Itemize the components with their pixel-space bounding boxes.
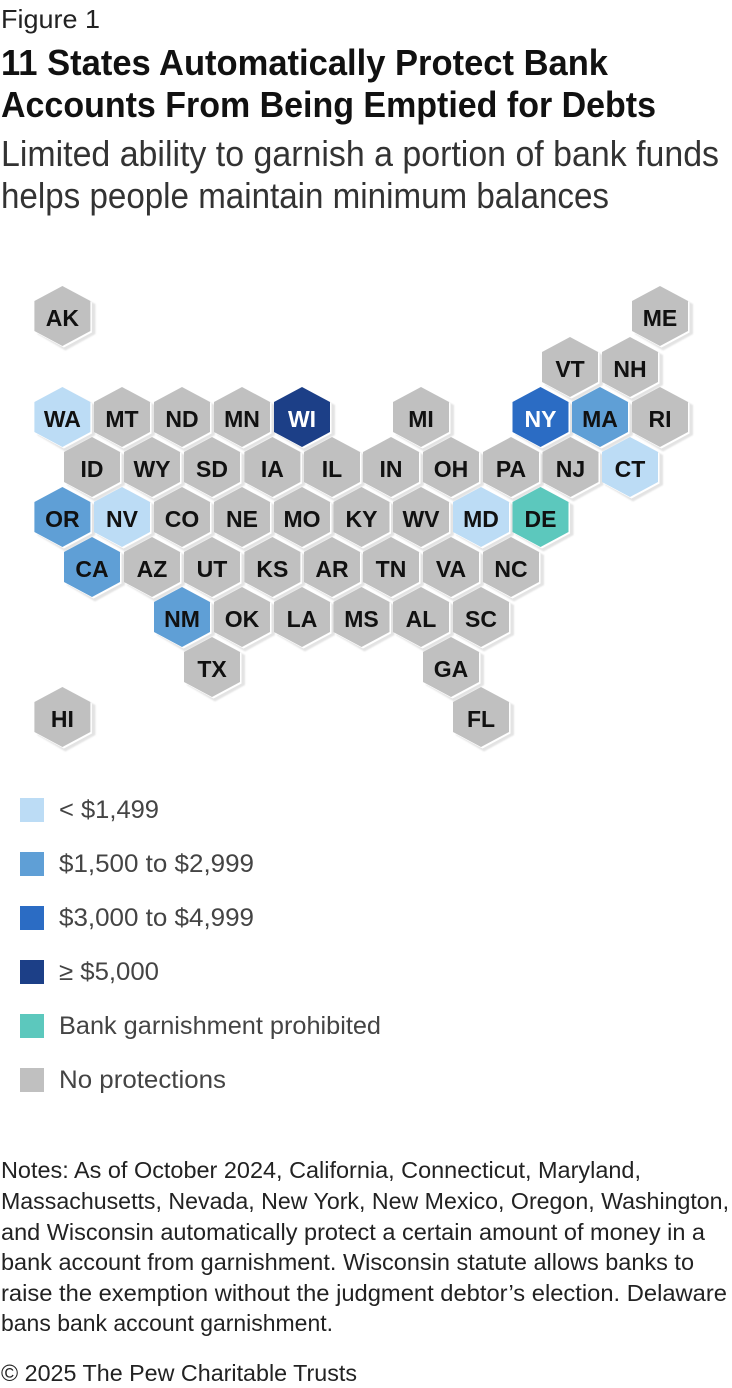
state: AL xyxy=(393,587,454,652)
subtitle xyxy=(1,133,719,216)
state: DE: DE xyxy=(525,506,556,532)
state: NY xyxy=(512,387,574,452)
title: 11 States Automatically Protect Bank xyxy=(1,42,609,83)
state: ID: ID xyxy=(80,456,104,482)
state: MN: MN xyxy=(224,406,260,432)
title xyxy=(1,42,656,125)
state: MI: MI xyxy=(408,406,434,432)
state: IA: IA xyxy=(261,456,284,482)
state: NE: NE xyxy=(226,506,258,532)
state: WV xyxy=(393,487,454,552)
state: KY: KY xyxy=(346,506,377,532)
state: OR xyxy=(34,487,95,552)
state: ME: ME xyxy=(643,305,677,331)
state: UT xyxy=(184,537,245,602)
state: LA xyxy=(274,587,335,652)
state: WV: WV xyxy=(402,506,440,532)
state: DE xyxy=(512,487,574,552)
state: WA xyxy=(34,387,95,452)
notes: and Wisconsin automatically protect a certain amount of money in a xyxy=(1,1219,705,1245)
state: LA: LA xyxy=(287,606,317,632)
state: SD xyxy=(184,437,245,502)
state: UT: UT xyxy=(197,556,227,582)
legend item: bank garnishment prohibited: Bank garnishment prohibited xyxy=(59,1012,381,1040)
state: SC xyxy=(453,587,514,652)
legend item: $5,000 or more: ≥ $5,000 xyxy=(59,958,159,986)
state: OH xyxy=(423,437,484,502)
state: TN: TN xyxy=(376,556,406,582)
state: ME xyxy=(632,286,693,350)
state: CT xyxy=(602,437,663,502)
state: CT: CT xyxy=(615,456,645,482)
state: MS xyxy=(334,587,394,652)
state: TX xyxy=(184,637,245,702)
state: MO: MO xyxy=(283,506,321,532)
state: WY xyxy=(124,437,185,502)
hex tile map of states xyxy=(34,286,693,752)
state: WA: WA xyxy=(44,406,81,432)
state: IA xyxy=(244,437,305,502)
state: FL: FL xyxy=(467,706,495,732)
notes xyxy=(1,1157,729,1336)
state: IN xyxy=(363,437,424,502)
state: GA xyxy=(423,637,484,702)
state: MI xyxy=(393,387,454,452)
state: NJ: NJ xyxy=(556,456,585,482)
state: RI: RI xyxy=(648,406,672,432)
state: KS: KS xyxy=(256,556,288,582)
legend item: $1,500 to $2,999: $1,500 to $2,999 xyxy=(59,850,254,878)
state: NH xyxy=(602,337,663,402)
notes: Notes: As of October 2024, California, Connecticut, Maryland, xyxy=(1,1157,641,1183)
state: MA: MA xyxy=(582,406,618,432)
figure label: Figure 1 xyxy=(1,4,100,34)
state: TN xyxy=(363,537,424,602)
state: AK xyxy=(34,286,95,350)
state: VT: VT xyxy=(555,356,585,382)
state: MT: MT xyxy=(105,406,139,432)
state: NY: NY xyxy=(525,406,556,432)
state: CO: CO xyxy=(165,506,199,532)
state: SD: SD xyxy=(196,456,228,482)
state: OH: OH xyxy=(434,456,468,482)
state: MA xyxy=(572,387,633,452)
state: GA: GA xyxy=(434,656,468,682)
state: MT xyxy=(94,387,155,452)
state: WI xyxy=(274,387,335,452)
state: NC: NC xyxy=(494,556,528,582)
state: CA: CA xyxy=(75,556,109,582)
state: VA xyxy=(423,537,484,602)
state: SC: SC xyxy=(465,606,497,632)
state: AZ: AZ xyxy=(137,556,167,582)
state: FL xyxy=(453,687,514,752)
legend item: $5,000 or more xyxy=(20,958,159,986)
state: NH: NH xyxy=(613,356,647,382)
state: NE xyxy=(214,487,275,552)
legend item: under $1,499: < $1,499 xyxy=(59,796,159,824)
state: HI: HI xyxy=(51,706,74,732)
notes: raise the exemption without the judgment debtor’s election. Delaware xyxy=(1,1280,727,1306)
state: PA: PA xyxy=(496,456,526,482)
notes: bans bank account garnishment. xyxy=(1,1310,333,1336)
state: KY xyxy=(334,487,394,552)
state: VT xyxy=(542,337,603,402)
state: PA xyxy=(483,437,544,502)
title: Accounts From Being Emptied for Debts xyxy=(1,84,656,125)
legend xyxy=(20,796,381,1094)
state: NC xyxy=(483,537,544,602)
notes: bank account from garnishment. Wisconsin statute allows banks to xyxy=(1,1249,694,1275)
state: ND xyxy=(154,387,215,452)
state: MD: MD xyxy=(463,506,499,532)
state: IL xyxy=(304,437,365,502)
state: NM xyxy=(154,587,215,652)
state: CA xyxy=(64,537,125,602)
legend item: no protections: No protections xyxy=(59,1066,226,1094)
state: MN xyxy=(214,387,275,452)
state: TX: TX xyxy=(197,656,227,682)
state: MD xyxy=(453,487,514,552)
subtitle: helps people maintain minimum balances xyxy=(1,175,609,216)
state: AK: AK xyxy=(46,305,79,331)
state: ND: ND xyxy=(165,406,199,432)
state: NV xyxy=(94,487,155,552)
state: WI: WI xyxy=(288,406,316,432)
state: IL: IL xyxy=(322,456,342,482)
state: MS: MS xyxy=(344,606,379,632)
state: AR xyxy=(304,537,365,602)
state: AR: AR xyxy=(315,556,349,582)
state: RI xyxy=(632,387,693,452)
legend item: $3,000 to $4,999: $3,000 to $4,999 xyxy=(59,904,254,932)
state: CO xyxy=(154,487,215,552)
state: IN: IN xyxy=(380,456,402,482)
state: NJ xyxy=(542,437,604,502)
state: AL: AL xyxy=(406,606,436,632)
state: NV: NV xyxy=(106,506,139,532)
state: OK xyxy=(214,587,275,652)
state: MO xyxy=(274,487,335,552)
state: NM: NM xyxy=(164,606,200,632)
state: ID xyxy=(64,437,125,502)
notes: Massachusetts, Nevada, New York, New Mexico, Oregon, Washington, xyxy=(1,1188,729,1214)
state: HI xyxy=(34,687,95,752)
copyright: © 2025 The Pew Charitable Trusts xyxy=(1,1360,357,1386)
state: KS xyxy=(244,537,305,602)
state: OR: OR xyxy=(45,506,80,532)
state: OK: OK xyxy=(225,606,260,632)
state: WY: WY xyxy=(133,456,171,482)
state: VA: VA xyxy=(436,556,466,582)
state: AZ xyxy=(124,537,185,602)
